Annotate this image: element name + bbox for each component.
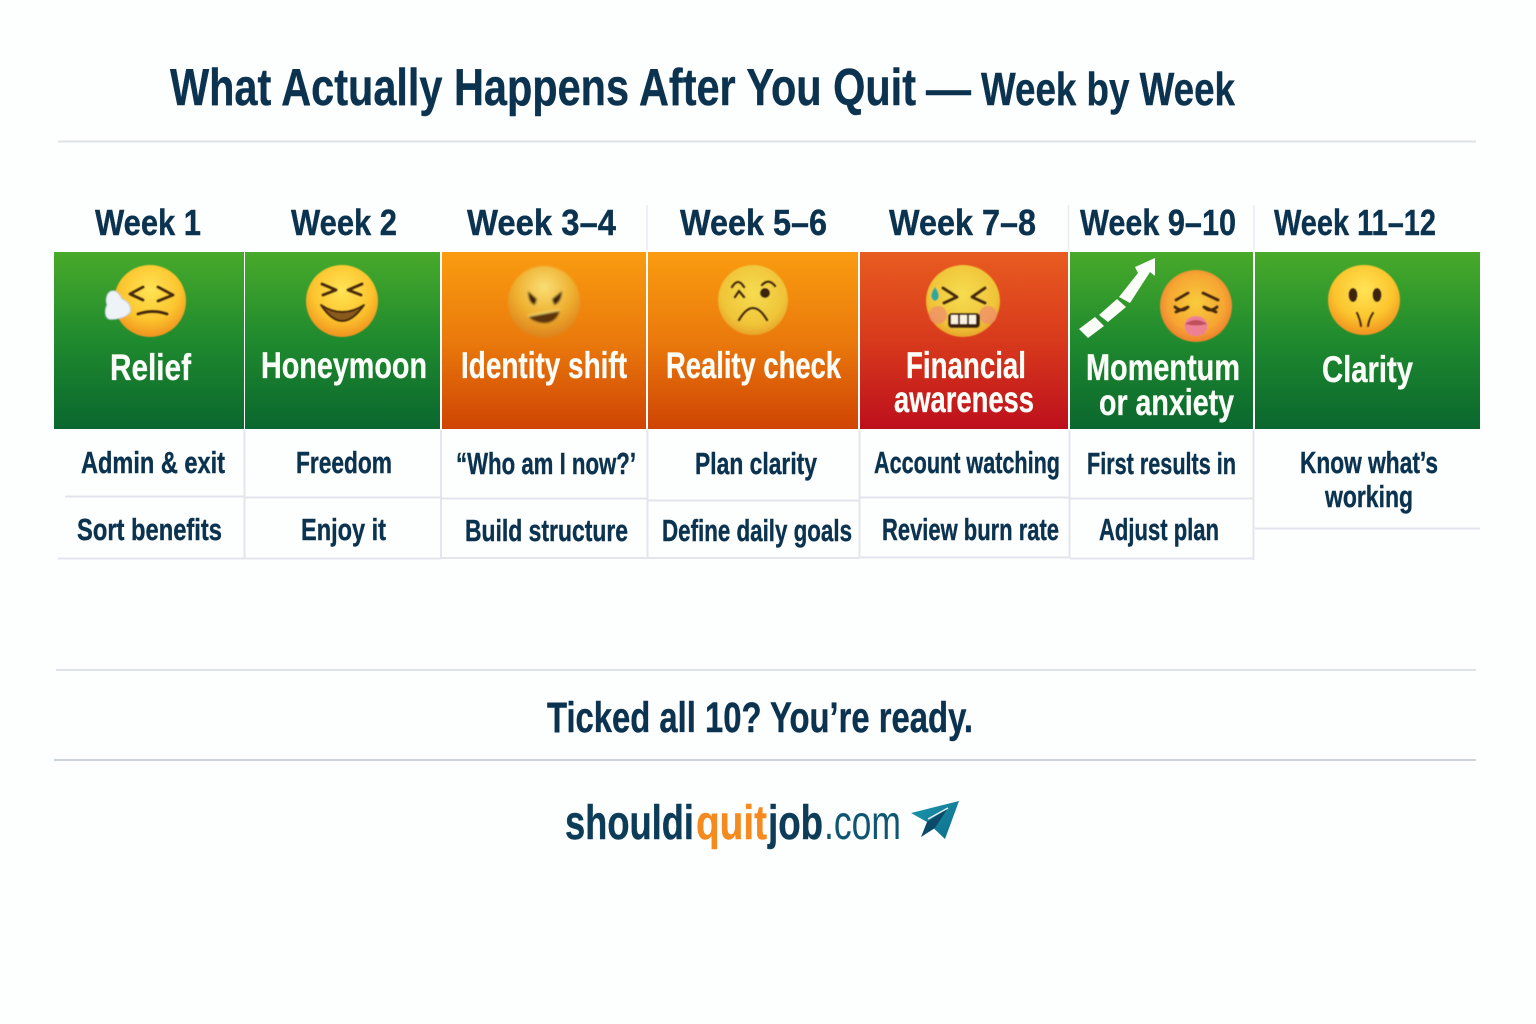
panel: week 5-6 reality check: Reality check	[666, 345, 841, 386]
icon: paper plane	[911, 801, 959, 839]
task list: week 11-12: working	[1324, 479, 1413, 514]
panel: week 9-10 momentum or anxiety	[1070, 252, 1253, 429]
title: —	[926, 63, 971, 115]
title: Week by Week	[981, 63, 1235, 115]
week headings row: Week 7–8	[889, 202, 1036, 243]
title: What Actually Happens After You Quit	[170, 59, 916, 117]
panel: week 7-8 financial awareness: Financial	[906, 345, 1026, 386]
task list: week 11-12	[1300, 445, 1438, 514]
panel: week 11-12 clarity	[1255, 252, 1480, 429]
task list: week 1: Admin & exit	[81, 445, 225, 480]
task list: week 7-8: Review burn rate	[882, 512, 1059, 547]
panel: week 1 relief	[54, 252, 244, 429]
panel: week 7-8 financial awareness: awareness	[894, 379, 1034, 420]
task list: week 5-6: Define daily goals	[662, 513, 852, 548]
week headings row: Week 3–4	[467, 202, 616, 243]
grid lines under panels	[58, 430, 1480, 560]
icon: exhaling face	[105, 265, 186, 337]
task list: week 9-10: Adjust plan	[1099, 512, 1219, 547]
panel: week 9-10 momentum or anxiety: Momentum	[1086, 347, 1240, 388]
icon: distressed flushed face	[1160, 270, 1232, 342]
panel: week 7-8 financial awareness	[860, 252, 1068, 429]
logo: shouldiquitjob.com: quit	[696, 797, 767, 850]
task list: week 2	[296, 445, 392, 547]
icon: rising dashed arrow	[1079, 258, 1155, 338]
panel: week 2 honeymoon: Honeymoon	[261, 345, 427, 386]
task list: week 7-8	[874, 445, 1060, 547]
panel: week 2 honeymoon	[245, 252, 440, 429]
panel: week 11-12 clarity: Clarity	[1322, 349, 1413, 390]
task list: week 9-10	[1087, 446, 1236, 547]
task list: week 3-4: Build structure	[465, 513, 628, 548]
icon: smirking face	[508, 266, 580, 338]
week headings row: Week 11–12	[1274, 202, 1436, 243]
panel: week 5-6 reality check	[648, 252, 858, 429]
task list: week 2: Freedom	[296, 445, 392, 480]
week headings row: Week 1	[95, 202, 201, 243]
closing message: Ticked all 10? You’re ready.	[547, 694, 973, 742]
task list: week 9-10: First results in	[1087, 446, 1236, 481]
task list: week 1	[77, 445, 225, 547]
icon: grinning face	[306, 265, 378, 337]
logo: shouldiquitjob.com: job	[767, 797, 823, 850]
task list: week 1: Sort benefits	[77, 512, 222, 547]
task list: week 3-4: “Who am I now?’	[456, 446, 636, 481]
panel: week 3-4 identity shift	[442, 252, 646, 429]
week headings row	[95, 202, 1436, 250]
task list: week 11-12: Know what’s	[1300, 445, 1438, 480]
panel: week 3-4 identity shift: Identity shift	[461, 345, 627, 386]
week headings row: Week 9–10	[1080, 202, 1236, 243]
icon: worried face	[718, 265, 788, 335]
logo: shouldiquitjob.com: shouldi	[565, 797, 694, 850]
week headings row: Week 2	[291, 202, 397, 243]
week headings row: Week 5–6	[680, 202, 827, 243]
icon: anxious teeth-gritting face	[926, 265, 1000, 337]
panel: week 1 relief: Relief	[110, 347, 192, 388]
logo: shouldiquitjob.com	[565, 797, 959, 850]
task list: week 5-6: Plan clarity	[695, 446, 818, 481]
panel: week 9-10 momentum or anxiety: or anxiety	[1099, 382, 1234, 423]
task list: week 7-8: Account watching	[874, 445, 1060, 480]
task list: week 3-4	[456, 446, 636, 548]
task list: week 5-6	[662, 446, 852, 548]
task list: week 2: Enjoy it	[301, 512, 386, 547]
logo: shouldiquitjob.com: .com	[824, 797, 901, 850]
icon: calm face	[1328, 265, 1400, 335]
